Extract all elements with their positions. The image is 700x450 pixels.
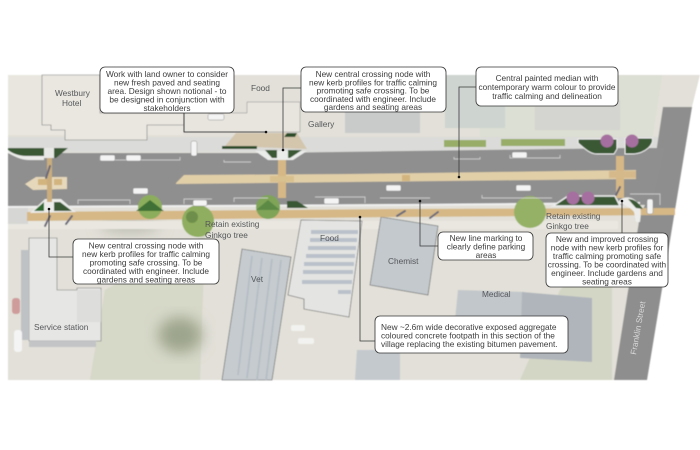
callout: land owner paved seating area	[100, 67, 234, 113]
building: Gallery	[345, 100, 420, 133]
coloured footpath	[27, 208, 675, 221]
pedestrian figures	[45, 166, 620, 226]
callout: central crossing node west: new kerb profiles for traffic calming	[82, 249, 210, 259]
callout: central crossing node north: New central crossing node with	[316, 69, 431, 79]
place label: Retain existing Ginkgo tree left: Retain existing	[205, 219, 260, 229]
callout: central crossing node north: gardens and seating areas	[324, 102, 422, 112]
building: Food south	[288, 220, 362, 317]
node: south-east gardens	[553, 196, 620, 206]
node: ginkgo tree right	[514, 196, 546, 228]
main street carriageway	[8, 148, 665, 207]
callout: central crossing node north: coordinated with engineer. Include	[310, 94, 436, 104]
place label: Medical: Medical	[482, 289, 511, 299]
place label: Gallery: Gallery	[308, 119, 335, 129]
leader lines	[48, 87, 623, 341]
callout: central crossing node north	[301, 67, 446, 112]
node: ginkgo tree left	[182, 205, 214, 237]
place label: Retain existing Ginkgo tree right: Retain existing	[546, 211, 601, 221]
callout: land owner paved seating area: area. Design shown notional - to	[108, 86, 227, 96]
kerb line	[8, 203, 640, 207]
callout: central crossing node west: gardens and seating areas	[97, 274, 195, 284]
crossings	[47, 156, 636, 202]
callout: line marking: New line marking to	[450, 233, 523, 243]
callout: line marking: areas	[476, 250, 496, 260]
callout: decorative footpath: New ~2.6m wide decorative exposed aggregate	[381, 322, 557, 332]
building: Service station	[29, 238, 101, 341]
place label: Service station: Service station	[34, 322, 89, 332]
callout: decorative footpath: village replacing the existing bitumen pavement.	[381, 339, 558, 349]
callout: central crossing node north: promoting safe crossing. To be	[317, 86, 430, 96]
callout: decorative footpath	[375, 316, 568, 353]
callout: central painted median: traffic calming and delineation	[492, 91, 602, 101]
parking bay line marking	[78, 155, 660, 205]
place label: Retain existing Ginkgo tree right: Ginkgo tree	[546, 221, 589, 231]
callout: improved crossing node: node with new kerb profiles for	[551, 242, 663, 252]
callout: line marking: clearly define parking	[447, 242, 526, 252]
callout: land owner paved seating area: new fresh paved and seating	[114, 78, 220, 88]
place label: Westbury Hotel: Hotel	[62, 98, 82, 108]
node: south-west kerb	[30, 199, 76, 213]
callout: land owner paved seating area: be designed in conjunction with	[109, 94, 225, 104]
place label: Retain existing Ginkgo tree left: Ginkgo tree	[205, 230, 248, 240]
callout: central crossing node west: coordinated with engineer. Include	[83, 266, 209, 276]
building: Vet	[222, 249, 291, 380]
node: north-west gardens	[8, 150, 44, 160]
callout: land owner paved seating area: stakeholders	[143, 103, 191, 113]
aerial base map	[8, 75, 700, 380]
callout: central painted median	[476, 67, 618, 106]
callout: central crossing node west: promoting safe crossing. To be	[90, 258, 203, 268]
building: south west shop	[355, 350, 400, 380]
place label: Chemist: Chemist	[388, 256, 419, 266]
place label: Retain existing Ginkgo tree right	[546, 211, 601, 231]
place label: Food south: Food	[320, 233, 339, 243]
node: verge strips	[444, 140, 486, 147]
callout: improved crossing node: seating areas	[582, 276, 632, 286]
place label: Retain existing Ginkgo tree left	[205, 219, 260, 240]
place label: Food north: Food	[251, 83, 270, 93]
callout: improved crossing node: New and improved crossing	[556, 234, 659, 244]
parked cars	[100, 114, 653, 214]
callout: central crossing node west	[73, 239, 219, 284]
building: Chemist	[370, 217, 438, 295]
callout: central painted median: Central painted median with	[496, 73, 599, 83]
callout: decorative footpath: coloured concrete footpath in this section of the	[381, 330, 555, 340]
node: north central plaza	[225, 133, 307, 149]
parked cars south	[291, 325, 305, 331]
node: street tree 1	[138, 195, 162, 219]
callout: improved crossing node	[546, 233, 668, 287]
node: north-east gardens	[578, 139, 617, 154]
buildings	[12, 75, 620, 380]
building: Medical	[455, 290, 525, 345]
place label: Westbury Hotel: Westbury	[55, 88, 91, 98]
building: Food north	[184, 102, 300, 132]
callout: improved crossing node: engineer. Include gardens and	[551, 268, 663, 278]
place label: Westbury Hotel	[55, 88, 91, 108]
Franklin Street road	[614, 107, 692, 380]
callout: central crossing node west: New central crossing node with	[89, 240, 204, 250]
callout: central painted median: contemporary warm colour to provide	[479, 82, 616, 92]
callout: improved crossing node: traffic calming promoting safe	[553, 251, 661, 261]
callout: land owner paved seating area: Work with land owner to consider	[106, 69, 228, 79]
callout: improved crossing node: crossing. To be coordinated with	[548, 260, 667, 270]
node: street tree 2	[256, 195, 280, 219]
place label: Vet: Vet	[251, 274, 264, 284]
callout: central crossing node north: new kerb profiles for traffic calming	[309, 78, 437, 88]
kerb nodes and gardens	[8, 133, 653, 237]
callout: line marking	[438, 232, 533, 260]
central painted median	[25, 170, 636, 190]
site plan artwork	[8, 75, 700, 380]
building: Westbury Hotel	[42, 75, 184, 140]
road label: Franklin Street: Franklin Street	[628, 300, 647, 355]
